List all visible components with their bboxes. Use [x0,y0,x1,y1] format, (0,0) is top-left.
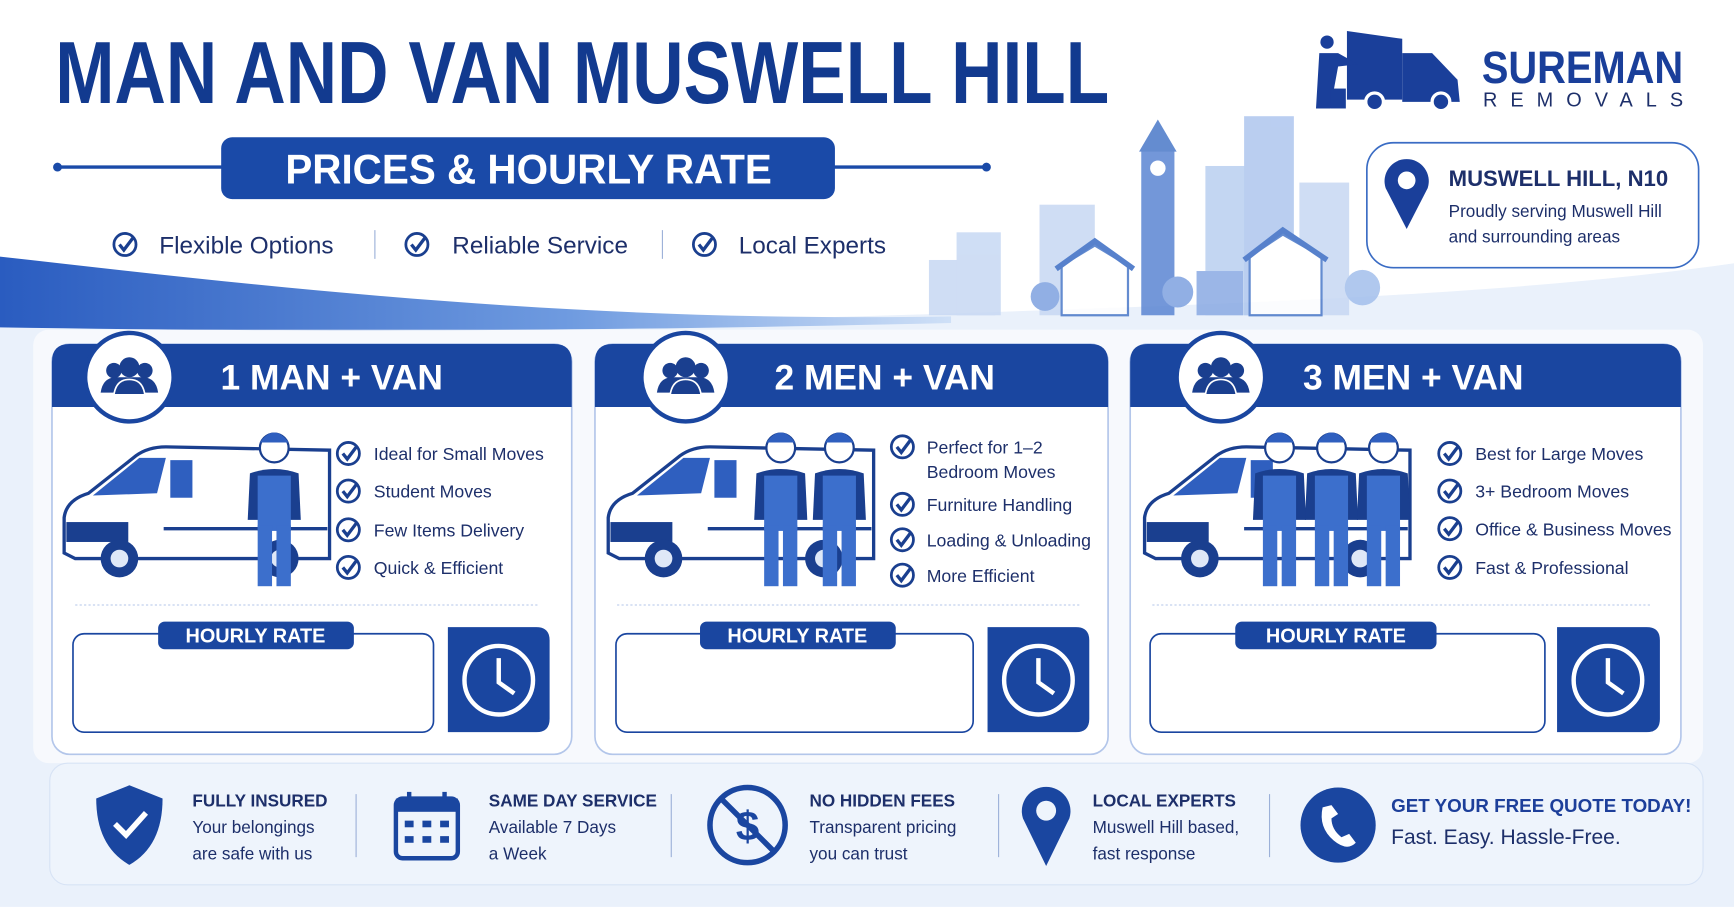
panel: 2 men + van: 2 MEN + VAN [774,358,995,397]
panel: 2 men + van: More Efficient [927,566,1035,586]
bottom benefits strip: Fast. Easy. Hassle-Free. [1391,826,1621,849]
bottom benefits strip: FULLY INSURED [192,790,328,810]
logo: REMOVALS [1483,89,1683,111]
panel: 1 man + van: Student Moves [374,482,492,502]
icon: shield [96,785,163,865]
panel: 1 man + van: 1 MAN + VAN [221,358,443,397]
panel: 1 man + van: Few Items Delivery [374,520,524,540]
icon: phone [1300,787,1376,863]
city skyline [929,116,1380,315]
background light area [0,263,1734,907]
location box: and surrounding areas [1449,226,1620,246]
bottom benefits strip: Your belongings [192,817,315,837]
location box [1367,143,1699,268]
icon: pin [1022,787,1070,866]
panel: 3 men + van: Best for Large Moves [1475,444,1643,464]
bottom benefits strip [50,763,1703,885]
location box: Proudly serving Muswell Hill [1449,201,1662,221]
panel: 2 men + van: HOURLY RATE [727,626,867,648]
panel: 3 men + van: HOURLY RATE [1266,626,1406,648]
feature checks row: Flexible Options [159,232,334,259]
bottom benefits strip: Available 7 Days [489,817,616,837]
bottom benefits strip: LOCAL EXPERTS [1093,790,1236,810]
icon: calendar [396,792,458,858]
bottom benefits strip: SAME DAY SERVICE [489,790,657,810]
location box: MUSWELL HILL, N10 [1449,166,1668,191]
panel: 2 men + van: Furniture Handling [927,495,1072,515]
panel: 1 man + van [52,333,572,754]
bottom benefits strip: Transparent pricing [809,817,956,837]
bottom benefits strip: fast response [1093,843,1195,863]
icon: no fees [710,787,785,863]
panel: 2 men + van: Perfect for 1–2 [927,438,1043,458]
panel: 1 man + van: HOURLY RATE [185,626,325,648]
bottom benefits strip: are safe with us [192,843,312,863]
panel: 3 men + van: 3+ Bedroom Moves [1475,482,1629,502]
feature checks row [114,230,886,259]
icon: van logo [1316,31,1460,111]
icon: pin [1385,159,1429,229]
title: MAN AND VAN MUSWELL HILL [55,23,1109,122]
wave band [0,257,951,330]
bottom benefits strip: GET YOUR FREE QUOTE TODAY! [1391,795,1691,816]
panel: 1 man + van: Quick & Efficient [374,558,503,578]
feature checks row: Reliable Service [452,232,628,259]
panel: 2 men + van: Loading & Unloading [927,530,1091,550]
card backdrop [33,330,1703,763]
panel: 3 men + van: 3 MEN + VAN [1303,358,1524,397]
ribbon: prices & hourly rate [53,137,991,199]
bottom benefits strip: NO HIDDEN FEES [809,790,955,810]
bottom benefits strip: you can trust [809,843,908,863]
logo [1316,31,1683,111]
panel: 1 man + van: Ideal for Small Moves [374,444,544,464]
bottom benefits strip: Muswell Hill based, [1093,817,1239,837]
panel: 2 men + van [595,333,1108,754]
panel: 3 men + van: Office & Business Moves [1475,519,1672,539]
feature checks row: Local Experts [739,232,886,259]
logo: SUREMAN [1482,42,1683,93]
panel: 3 men + van [1130,333,1681,754]
bottom benefits strip: a Week [489,843,547,863]
icon: no fees: $ [736,803,759,850]
ribbon: prices & hourly rate: PRICES & HOURLY RATE [285,146,772,193]
panel: 3 men + van: Fast & Professional [1475,558,1629,578]
panel: 2 men + van: Bedroom Moves [927,462,1056,482]
